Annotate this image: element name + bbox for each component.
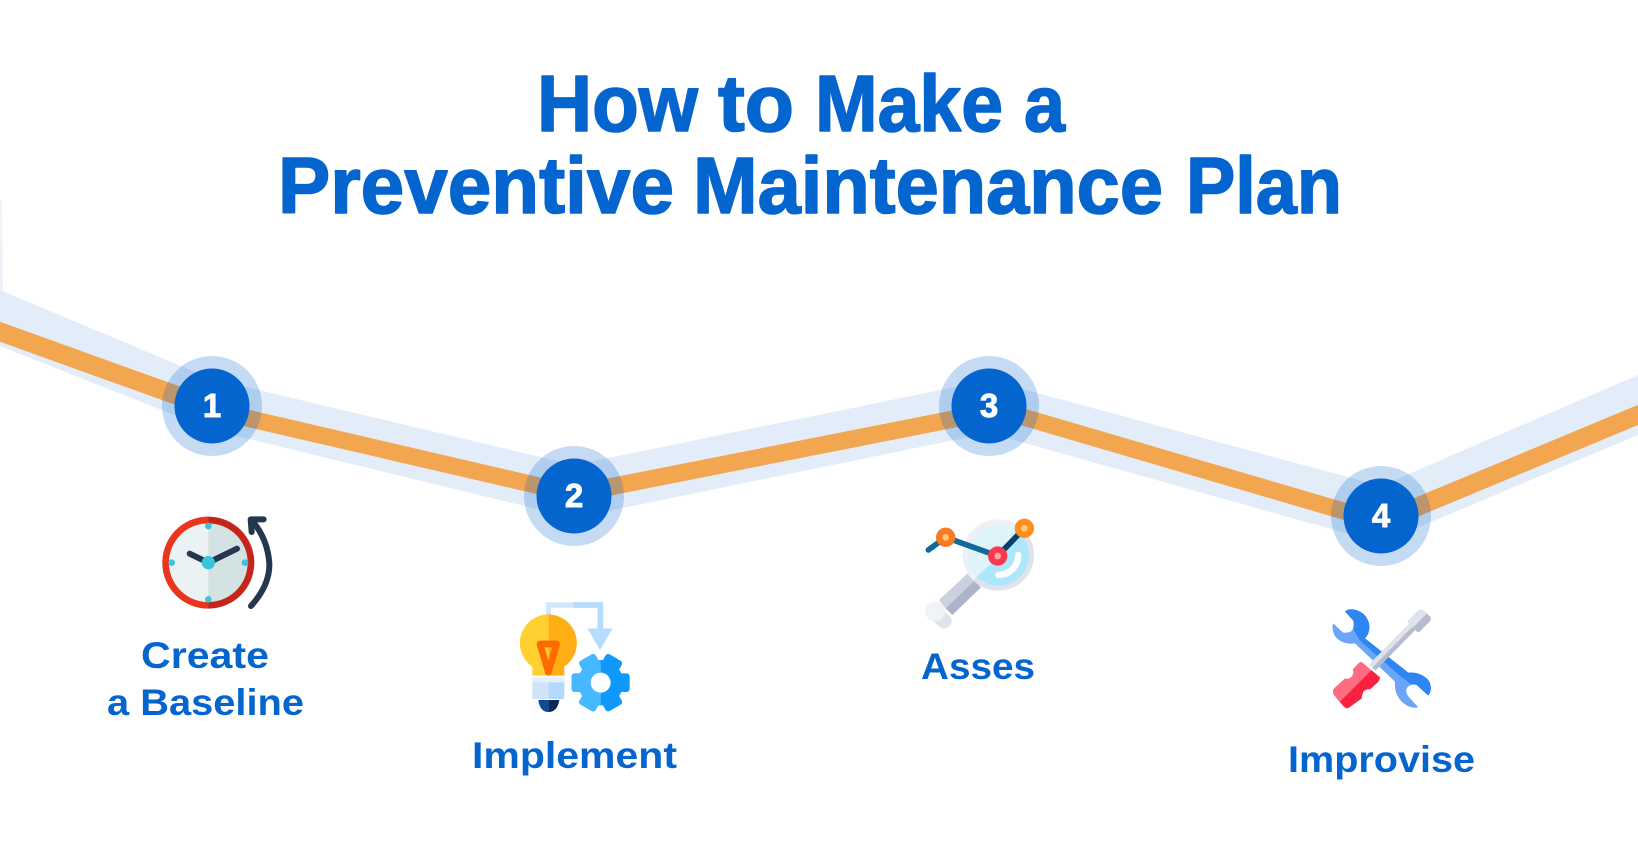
step marker 3 xyxy=(939,356,1039,456)
step marker 4: 4 xyxy=(1372,497,1391,534)
title: Plan xyxy=(1186,141,1342,230)
icon: clock with arrow xyxy=(162,517,269,609)
icon: light bulb and gear xyxy=(520,605,630,712)
title: to xyxy=(718,59,794,148)
title: Make xyxy=(815,59,1003,148)
title: a xyxy=(1024,59,1065,148)
timeline path xyxy=(0,200,1638,543)
label: asses: Asses xyxy=(921,646,1035,687)
icon: magnifier with chart xyxy=(925,519,1034,621)
label: improvise: Improvise xyxy=(1288,739,1475,780)
step marker 2 xyxy=(524,446,624,546)
label: implement: Implement xyxy=(472,735,677,776)
label: create a baseline xyxy=(107,635,304,723)
label: create a baseline: a Baseline xyxy=(107,682,304,723)
step marker 1 xyxy=(162,356,262,456)
step marker 4 xyxy=(1331,466,1431,566)
step marker 1: 1 xyxy=(203,387,221,424)
title xyxy=(278,59,1342,230)
title: Maintenance xyxy=(693,141,1163,230)
title: Preventive xyxy=(278,141,674,230)
step marker 2: 2 xyxy=(565,477,583,514)
step marker 3: 3 xyxy=(980,387,998,424)
icon: crossed wrench and screwdriver xyxy=(1332,609,1431,708)
title: How xyxy=(537,59,699,148)
label: create a baseline: Create xyxy=(141,635,269,676)
